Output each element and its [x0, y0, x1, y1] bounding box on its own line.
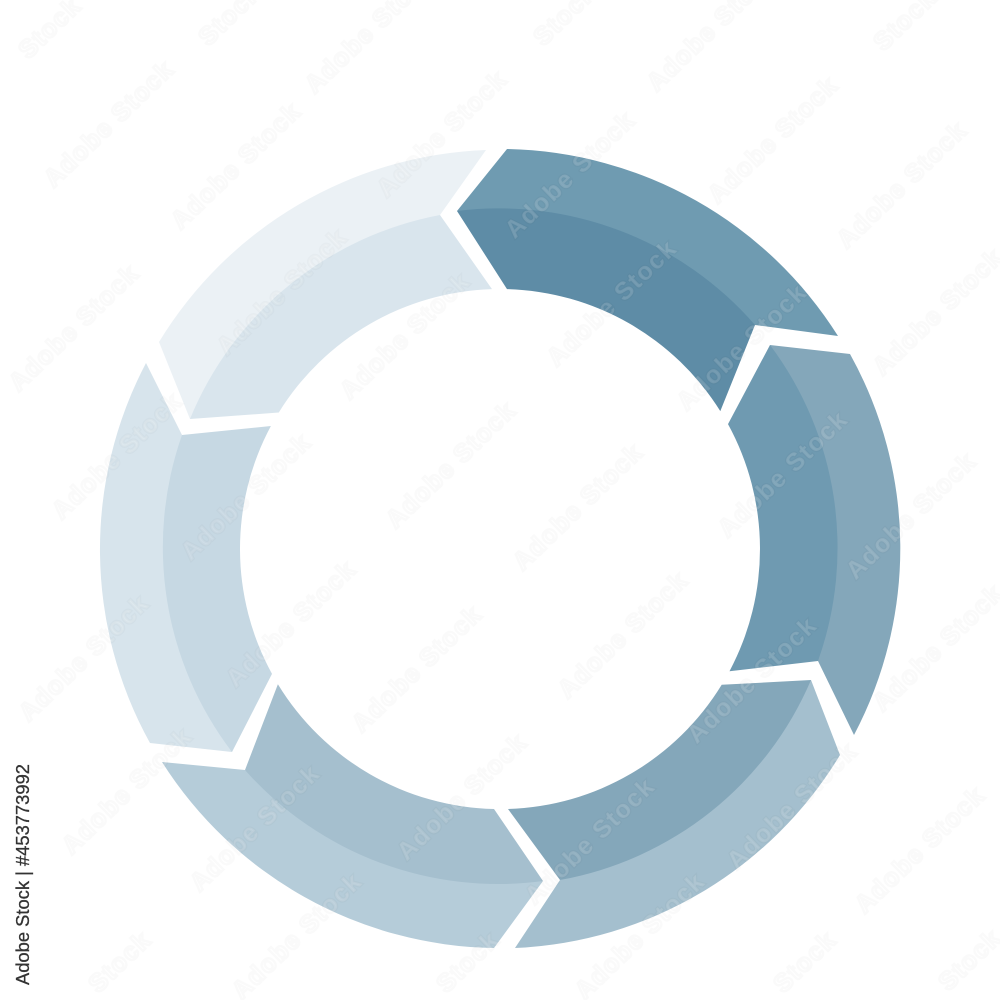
watermark pattern: Adobe Stock	[184, 759, 326, 897]
watermark pattern: Adobe Stock	[702, 71, 844, 209]
watermark pattern: Adobe Stock	[552, 566, 694, 704]
watermark pattern: Adobe Stock	[712, 405, 854, 543]
watermark pattern: Adobe Stock	[849, 781, 991, 919]
watermark pattern: Adobe Stock	[371, 65, 513, 203]
watermark pattern: Adobe Stock	[681, 611, 823, 749]
watermark pattern: Adobe Stock	[380, 396, 522, 534]
watermark pattern: Adobe Stock	[175, 428, 317, 566]
watermark pattern: Adobe Stock	[541, 234, 683, 372]
watermark pattern: Adobe Stock	[840, 447, 982, 585]
watermark pattern: Adobe Stock	[56, 722, 198, 860]
watermark pattern: Adobe Stock	[721, 737, 863, 875]
watermark pattern: Adobe Stock	[346, 600, 488, 738]
arrow segment 6: top left	[159, 150, 492, 419]
watermark pattern: Adobe Stock	[391, 728, 533, 866]
watermark pattern: Stock	[431, 926, 505, 998]
vertical stock credit text: Adobe Stock | #453773992	[13, 764, 33, 985]
arrow segment 3: bottom right	[508, 680, 840, 948]
arrow segment 2: right	[728, 345, 900, 735]
watermark pattern: Stock	[83, 926, 157, 998]
arrow segment 5: left	[100, 363, 272, 752]
watermark pattern: Adobe Stock	[46, 387, 188, 525]
watermark pattern: Adobe Stock	[499, 106, 641, 244]
circular arrow cycle diagram	[100, 149, 900, 948]
watermark pattern: Adobe Stock	[519, 772, 661, 910]
watermark pattern: Adobe Stock	[334, 267, 476, 405]
arrow segment 4: bottom left	[162, 684, 543, 948]
watermark pattern: Adobe Stock	[220, 555, 362, 693]
watermark pattern: Adobe Stock	[671, 278, 813, 416]
watermark pattern: Adobe Stock	[3, 259, 145, 397]
watermark pattern: Adobe Stock	[507, 438, 649, 576]
watermark pattern: Stock	[768, 926, 842, 998]
watermark pattern: Adobe Stock	[38, 55, 180, 193]
watermark pattern: Adobe Stock	[165, 97, 307, 235]
arrow segment 1: top right	[457, 149, 838, 411]
watermark pattern: Adobe Stock	[13, 589, 155, 727]
watermark pattern: Adobe Stock	[831, 116, 973, 254]
watermark pattern: Adobe Stock	[211, 223, 353, 361]
